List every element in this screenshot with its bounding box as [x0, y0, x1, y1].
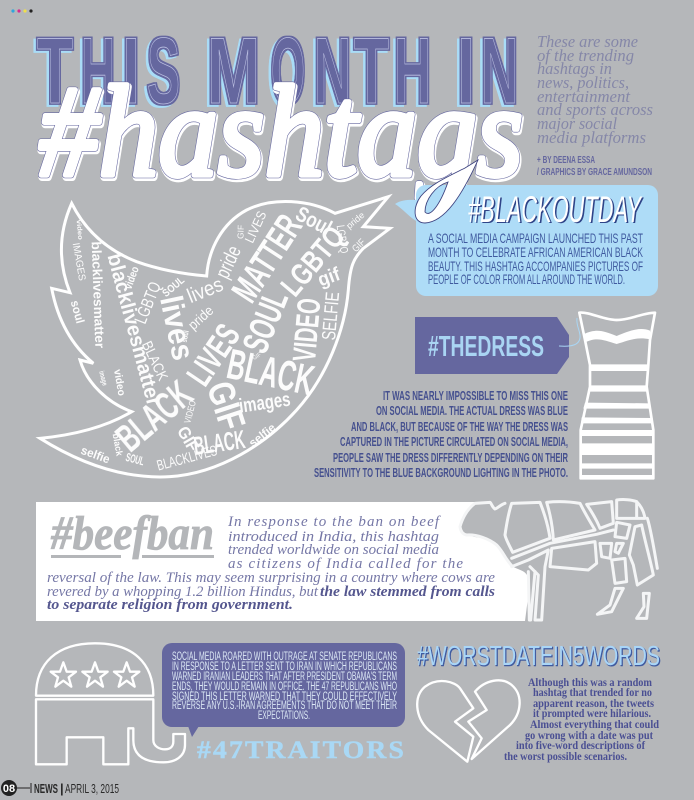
- subtitle: major social: [537, 114, 617, 133]
- tag string: [559, 318, 580, 346]
- title: THIS MONTH IN: I: [457, 18, 475, 123]
- footer text: NEWS: [34, 781, 58, 796]
- panel: worstdatein5words: [417, 640, 661, 763]
- icon: dress: [579, 313, 655, 478]
- title: #hashtags: #hashtags: [39, 60, 523, 204]
- word cloud: soul: [68, 299, 87, 325]
- word cloud: pride: [344, 210, 366, 231]
- body text: trended worldwide on social media: [228, 542, 439, 558]
- title: THIS MONTH IN: M: [207, 18, 260, 123]
- title: THIS MONTH IN: N: [314, 18, 351, 123]
- heading underline: [51, 555, 214, 558]
- body text: introduced in India, this hashtag: [228, 529, 440, 545]
- bubble text: REVERSE ANY U.S.-IRAN AGREEMENTS THAT DO NOT MEET THEIR: [172, 700, 397, 712]
- word cloud: pride: [211, 242, 246, 282]
- tag label: #THEDRESS: [428, 331, 544, 363]
- speech pointer: [395, 200, 418, 222]
- body text: ON SOCIAL MEDIA. THE ACTUAL DRESS WAS BLUE: [376, 403, 568, 418]
- speech bubble: [162, 643, 405, 737]
- word cloud: SELFIE: [319, 291, 344, 341]
- subtitle: These are some: [537, 32, 638, 51]
- word cloud: LIVES: [179, 317, 248, 393]
- bubble text: WARNED IRANIAN LEADERS THAT AFTER PRESIDENT OBAMA'S TERM: [172, 671, 397, 683]
- word cloud: images: [238, 389, 292, 418]
- body text: apparent reason, the tweets: [533, 698, 654, 710]
- word cloud: LGBTQ: [274, 220, 352, 303]
- bubble text: EXPECTATIONS.: [258, 710, 310, 722]
- body text: In response to the ban on beef: [227, 514, 441, 530]
- panel: blackoutday: [395, 160, 658, 296]
- body text: Almost everything that could: [530, 719, 660, 731]
- body text: the law stemmed from calls: [320, 584, 495, 600]
- word cloud: Soul: [292, 202, 336, 240]
- word cloud: VIDEO: [285, 297, 327, 363]
- word cloud: BLACK: [223, 340, 318, 405]
- word cloud: MATTER: [223, 207, 310, 309]
- body text: to separate religion from government.: [47, 597, 293, 613]
- word cloud: LIVES: [242, 209, 270, 245]
- subtitle: [537, 32, 653, 147]
- tag: [415, 317, 569, 374]
- subtitle: entertainment: [537, 87, 631, 106]
- word cloud: lives: [153, 292, 202, 363]
- word cloud: selfie: [247, 422, 278, 450]
- word cloud: pride: [185, 302, 217, 333]
- footer text: APRIL 3, 2015: [65, 781, 119, 796]
- word cloud: LGBTQ: [334, 224, 350, 254]
- word cloud: image: [97, 370, 110, 387]
- body text: Although this was a random: [528, 677, 652, 689]
- word cloud: GIF: [199, 376, 254, 435]
- subtitle: media platforms: [537, 128, 646, 147]
- icon: twitter bird word cloud: [40, 197, 390, 477]
- heading: #47TRAITORS: [197, 737, 406, 764]
- body text: as citizens of India called for the: [228, 556, 463, 572]
- body text: into five-word descriptions of: [516, 740, 645, 752]
- icon: cow: [460, 500, 657, 620]
- page number: 08: [3, 783, 15, 795]
- body text: it prompted were hilarious.: [533, 708, 651, 720]
- title: THIS MONTH IN: I: [122, 18, 140, 123]
- title: THIS MONTH IN: T: [37, 18, 73, 123]
- icon: broken heart: [417, 680, 520, 762]
- panel: beefban: [36, 500, 657, 621]
- word cloud: [68, 202, 368, 475]
- bubble text: SOCIAL MEDIA ROARED WITH OUTRAGE AT SENATE REPUBLICANS: [172, 651, 397, 663]
- word cloud: video: [123, 265, 142, 291]
- body text: go wrong with a date was put: [525, 730, 653, 742]
- word cloud: black: [111, 433, 125, 457]
- bubble text: SIGNED THIS LETTER WARNED THAT THEY COULD EFFECTIVELY: [172, 691, 397, 703]
- title: THIS MONTH IN: O: [271, 18, 305, 123]
- footer text: [34, 781, 119, 796]
- title: THIS MONTH IN: S: [147, 18, 180, 123]
- heading: #beefban: [50, 507, 214, 560]
- body text: hashtag that trended for no: [533, 687, 652, 699]
- bubble text: [172, 651, 397, 722]
- subtitle: and sports across: [537, 100, 653, 119]
- word cloud: blacklivesmatter: [89, 241, 107, 348]
- word cloud: gif: [315, 264, 344, 291]
- g descender: [415, 160, 478, 223]
- word cloud: BLACKLIVES: [155, 443, 219, 475]
- word cloud: SOUL: [124, 450, 146, 468]
- word cloud: IMAGES: [70, 242, 87, 282]
- title: THIS MONTH IN: [37, 18, 518, 123]
- registration dots: [11, 9, 33, 13]
- subtitle: hashtags in: [537, 59, 612, 78]
- bubble text: IN RESPONSE TO A LETTER SENT TO IRAN IN WHICH REPUBLICANS: [172, 661, 397, 673]
- white panel: [36, 502, 529, 621]
- footer rule: [17, 783, 31, 793]
- word cloud: BLACK: [138, 339, 170, 384]
- word cloud: LGBTQ: [130, 279, 165, 326]
- blue box: [416, 185, 658, 296]
- word cloud: GIF: [350, 237, 368, 255]
- title: THIS MONTH IN: H: [81, 18, 115, 123]
- bubble text: ENDS, THEY WOULD REMAIN IN OFFICE. THE 47 REPUBLICANS WHO: [172, 681, 397, 693]
- word cloud: SOUL: [160, 274, 187, 300]
- byline: + BY DEENA ESSA: [537, 154, 595, 166]
- footer text: |: [60, 781, 64, 796]
- title: #hashtags: #hashtags: [39, 60, 523, 204]
- word cloud: video: [111, 368, 128, 397]
- title: THIS MONTH IN: N: [481, 18, 518, 123]
- word cloud: GIF: [252, 352, 263, 362]
- title: THIS MONTH IN: H: [394, 18, 431, 123]
- body text: [47, 514, 495, 613]
- subtitle: news, politics,: [537, 73, 629, 92]
- word cloud: GIF: [173, 423, 204, 455]
- word cloud: video: [75, 220, 83, 240]
- body text: revered by a whopping 1.2 billion Hindus, but: [47, 584, 319, 600]
- panel: 47traitors: [36, 643, 406, 764]
- word cloud: BLACK: [108, 372, 201, 460]
- word cloud: blacklivesmatter: [103, 251, 165, 408]
- body text: [504, 677, 660, 763]
- word cloud: selfie: [79, 443, 112, 467]
- body text: [428, 230, 643, 287]
- word cloud: soul: [180, 330, 191, 343]
- byline: [537, 154, 652, 178]
- footer: [1, 780, 119, 796]
- body text: the worst possible scenarios.: [504, 751, 627, 763]
- icon: republican elephant: [36, 643, 185, 764]
- body text: IT WAS NEARLY IMPOSSIBLE TO MISS THIS ONE: [383, 388, 568, 403]
- panel: thedress: [314, 313, 655, 480]
- word cloud: VIDEO: [182, 399, 198, 425]
- subtitle: of the trending: [537, 46, 634, 65]
- title: #hashtags: #hashtags: [40, 62, 524, 206]
- title: THIS MONTH IN: T: [354, 18, 389, 123]
- word cloud: BLACK: [192, 424, 247, 461]
- body text: reversal of the law. This may seem surprising in a country where cows are: [47, 570, 495, 586]
- word cloud: SOUL: [234, 285, 296, 359]
- body text: [314, 388, 568, 480]
- word cloud: GIF: [235, 225, 246, 239]
- bird outline: [40, 197, 390, 477]
- word cloud: lives: [184, 273, 227, 308]
